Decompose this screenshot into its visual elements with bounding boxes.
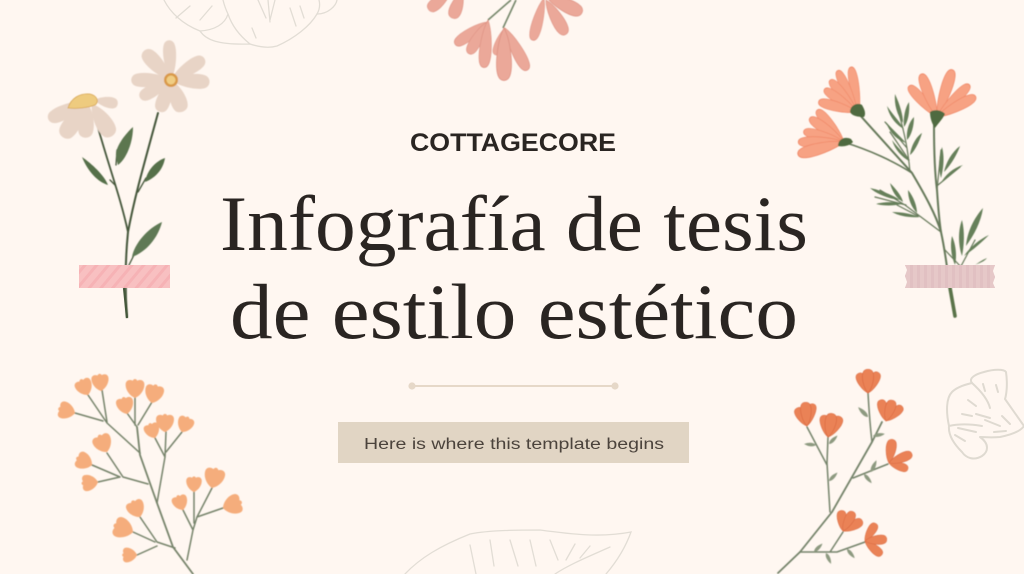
tape: pink bbox=[79, 265, 170, 288]
stems bbox=[488, 0, 516, 28]
petals bbox=[425, 0, 585, 80]
line art: right flower bbox=[947, 370, 1024, 459]
title: de estilo estético bbox=[230, 268, 798, 355]
plant: pink flowers top bbox=[425, 0, 585, 80]
stems bbox=[843, 110, 975, 290]
leaves bbox=[116, 127, 133, 165]
fern leaves bbox=[870, 94, 989, 265]
buds bbox=[56, 373, 245, 562]
left daisy petals bbox=[45, 94, 119, 142]
subtitle box bbox=[338, 422, 689, 463]
eyebrow heading: COTTAGECORE bbox=[410, 129, 616, 157]
title: Infografía de tesis bbox=[220, 180, 808, 267]
right daisy petals bbox=[131, 40, 210, 115]
stems bbox=[93, 110, 158, 317]
subtitle box: Here is where this template begins bbox=[364, 436, 664, 453]
plant: red-orange flowers bottom right bbox=[778, 369, 914, 573]
plant: coral flowers top right bbox=[796, 66, 989, 316]
flowers bbox=[793, 369, 914, 558]
divider bbox=[408, 382, 619, 390]
tape: mauve bbox=[905, 265, 995, 288]
title bbox=[220, 180, 808, 355]
calyxes bbox=[838, 104, 945, 146]
flower petals bbox=[796, 66, 978, 160]
line art: bottom leaf bbox=[405, 530, 631, 574]
line art: top leaf bbox=[164, 0, 337, 47]
small leaves bbox=[804, 406, 885, 565]
stem below tape bbox=[124, 288, 127, 318]
branches bbox=[75, 390, 223, 574]
branches bbox=[778, 393, 888, 573]
plant: orange buds bottom left bbox=[56, 373, 245, 574]
stem below tape bbox=[950, 288, 955, 316]
plant: daisies top left bbox=[45, 40, 210, 317]
